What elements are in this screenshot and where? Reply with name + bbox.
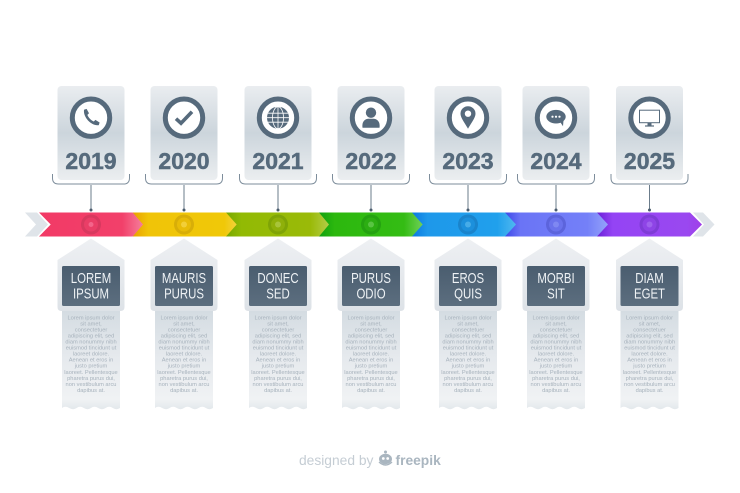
- description text: adipiscing elit, sed: [533, 334, 579, 340]
- node: [268, 214, 288, 234]
- description text: laoreet dolore.: [538, 352, 575, 358]
- description text: adipiscing elit, sed: [255, 334, 301, 340]
- description text: Lorem ipsum dolor: [532, 316, 580, 322]
- label text: DIAM: [635, 269, 664, 286]
- icon: freepik logo: [379, 450, 392, 465]
- label box: [62, 266, 120, 306]
- bracket: [146, 174, 222, 184]
- label text: [257, 269, 299, 302]
- node: [361, 214, 381, 234]
- bracket: [240, 174, 316, 184]
- label text: QUIS: [454, 285, 482, 302]
- description text: laoreet. Pellentesque: [157, 370, 211, 376]
- description text: laoreet. Pellentesque: [529, 370, 583, 376]
- footer credit: [299, 450, 441, 468]
- segment 2023: [412, 212, 516, 236]
- arrow: right grey chevron: [693, 212, 714, 236]
- description text: pharetra purus dui,: [532, 376, 580, 382]
- description text: Lorem ipsum dolor: [347, 316, 395, 322]
- label box: [342, 266, 400, 306]
- description text: sit amet,: [360, 322, 382, 328]
- freepik text: freepik: [396, 453, 441, 468]
- description text: euismod tincidunt ut: [443, 346, 494, 352]
- description text: justo pretium: [261, 364, 295, 370]
- description text: dapibus at.: [454, 388, 482, 394]
- description text: Lorem ipsum dolor: [160, 316, 208, 322]
- description text: Lorem ipsum dolor: [254, 316, 302, 322]
- label text: [537, 269, 575, 302]
- description text: euismod tincidunt ut: [531, 346, 582, 352]
- description text: pharetra purus dui,: [626, 376, 674, 382]
- label text: SIT: [547, 285, 565, 302]
- description text: non vestibulum arcu: [531, 382, 581, 388]
- label box: [155, 266, 213, 306]
- year card: [150, 86, 218, 180]
- description text: adipiscing elit, sed: [68, 334, 114, 340]
- description text: sit amet,: [173, 322, 195, 328]
- description text: pharetra purus dui,: [67, 376, 115, 382]
- label text: [634, 269, 665, 302]
- description text: justo pretium: [74, 364, 108, 370]
- label text: MORBI: [537, 269, 575, 286]
- description text: euismod tincidunt ut: [253, 346, 304, 352]
- designed by text: designed by: [299, 453, 374, 468]
- description text: laoreet dolore.: [166, 352, 203, 358]
- description text: consectetuer: [75, 328, 107, 334]
- label tag: [58, 238, 124, 311]
- description text: sit amet,: [639, 322, 661, 328]
- segment 2022: [319, 212, 423, 236]
- column 2025: [611, 86, 688, 409]
- description text: non vestibulum arcu: [443, 382, 493, 388]
- label box: [249, 266, 307, 306]
- label tag: [616, 238, 683, 311]
- description text: dapibus at.: [542, 388, 570, 394]
- label box: [620, 266, 678, 306]
- description text: non vestibulum arcu: [346, 382, 396, 388]
- year: 2024: [530, 148, 582, 174]
- description text: adipiscing elit, sed: [445, 334, 491, 340]
- column 2024: [518, 86, 594, 409]
- description text: consectetuer: [355, 328, 387, 334]
- description text: diam nonummy nibh: [345, 340, 397, 346]
- connector: [90, 185, 92, 212]
- label tag: [434, 238, 502, 311]
- description text: justo pretium: [539, 364, 573, 370]
- description text: pharetra purus dui,: [347, 376, 395, 382]
- description text: laoreet dolore.: [260, 352, 297, 358]
- description text: laoreet dolore.: [73, 352, 110, 358]
- description text: non vestibulum arcu: [624, 382, 675, 388]
- year: 2021: [252, 148, 304, 174]
- label text: PURUS: [164, 285, 204, 302]
- column 2021: [240, 86, 316, 409]
- description text: justo pretium: [167, 364, 201, 370]
- label box: [439, 266, 497, 306]
- description text: Aenean et eros in: [256, 358, 300, 364]
- bracket: [430, 174, 506, 184]
- label text: [351, 269, 391, 302]
- column 2019: [52, 86, 130, 409]
- label text: IPSUM: [73, 285, 109, 302]
- arrow: left grey chevron: [25, 212, 48, 236]
- year card: [338, 86, 404, 180]
- description text: euismod tincidunt ut: [66, 346, 117, 352]
- description text: sit amet,: [267, 322, 289, 328]
- description paper: [155, 311, 213, 409]
- connector: [554, 185, 558, 212]
- label text: LOREM: [71, 269, 111, 286]
- segment 2025: [597, 212, 702, 236]
- label text: EGET: [634, 285, 665, 302]
- description text: Lorem ipsum dolor: [67, 316, 115, 322]
- description text: laoreet. Pellentesque: [251, 370, 305, 376]
- description text: dapibus at.: [264, 388, 292, 394]
- bracket: [52, 174, 130, 184]
- description text: consectetuer: [452, 328, 484, 334]
- description text: non vestibulum arcu: [159, 382, 209, 388]
- icon: phone: [72, 99, 110, 136]
- timeline bar: [39, 212, 702, 236]
- description text: laoreet dolore.: [353, 352, 390, 358]
- node: [458, 214, 478, 234]
- description text: diam nonummy nibh: [530, 340, 582, 346]
- bracket: [611, 174, 688, 184]
- description text: sit amet,: [457, 322, 479, 328]
- description text: pharetra purus dui,: [254, 376, 302, 382]
- bracket: [332, 174, 410, 184]
- description text: pharetra purus dui,: [444, 376, 492, 382]
- description text: Aenean et eros in: [627, 358, 672, 364]
- description text: pharetra purus dui,: [160, 376, 208, 382]
- label tag: [522, 238, 590, 311]
- description text: dapibus at.: [170, 388, 198, 394]
- description text: euismod tincidunt ut: [624, 346, 675, 352]
- year: 2020: [158, 148, 210, 174]
- icon: chat bubble: [537, 99, 575, 136]
- label text: ODIO: [356, 285, 386, 302]
- label text: PURUS: [351, 269, 391, 286]
- description text: laoreet. Pellentesque: [441, 370, 495, 376]
- description text: Aenean et eros in: [534, 358, 578, 364]
- description text: sit amet,: [545, 322, 567, 328]
- bracket: [518, 174, 594, 184]
- year: 2023: [442, 148, 494, 174]
- label text: [162, 269, 206, 302]
- label tag: [150, 238, 218, 311]
- connector: [648, 185, 651, 212]
- description text: sit amet,: [80, 322, 102, 328]
- column 2020: [146, 86, 222, 409]
- column 2023: [430, 86, 506, 409]
- label text: EROS: [452, 269, 484, 286]
- description text: diam nonummy nibh: [65, 340, 117, 346]
- year card: [244, 86, 312, 180]
- description text: dapibus at.: [636, 388, 664, 394]
- description text: diam nonummy nibh: [442, 340, 494, 346]
- connector: [466, 185, 470, 212]
- connector: [182, 185, 186, 212]
- year card: [522, 86, 590, 180]
- segment 2019: [39, 212, 143, 236]
- connector: [276, 185, 280, 212]
- year card: [616, 86, 683, 180]
- description text: adipiscing elit, sed: [626, 334, 673, 340]
- year card: [58, 86, 124, 180]
- node: [546, 214, 566, 234]
- year: 2022: [345, 148, 397, 174]
- description text: laoreet. Pellentesque: [64, 370, 118, 376]
- description text: justo pretium: [354, 364, 388, 370]
- description text: Aenean et eros in: [446, 358, 490, 364]
- description text: consectetuer: [262, 328, 294, 334]
- description text: justo pretium: [632, 364, 666, 370]
- label box: [527, 266, 585, 306]
- icon: person: [352, 99, 390, 136]
- node: [81, 214, 101, 234]
- description text: non vestibulum arcu: [253, 382, 303, 388]
- label tag: [338, 238, 404, 311]
- description text: Lorem ipsum dolor: [444, 316, 492, 322]
- label text: [71, 269, 111, 302]
- year: 2019: [65, 148, 117, 174]
- description text: dapibus at.: [77, 388, 105, 394]
- year card: [434, 86, 502, 180]
- label text: DONEC: [257, 269, 299, 286]
- description text: Lorem ipsum dolor: [626, 316, 673, 322]
- description text: adipiscing elit, sed: [348, 334, 394, 340]
- description text: consectetuer: [168, 328, 200, 334]
- description paper: [249, 311, 307, 409]
- description text: laoreet dolore.: [631, 352, 668, 358]
- column 2022: [332, 86, 410, 409]
- label text: [452, 269, 484, 302]
- description text: non vestibulum arcu: [66, 382, 116, 388]
- segment 2020: [133, 212, 237, 236]
- segment 2024: [505, 212, 608, 236]
- description paper: [620, 311, 678, 409]
- description text: dapibus at.: [357, 388, 385, 394]
- segment 2021: [226, 212, 329, 236]
- description text: diam nonummy nibh: [158, 340, 210, 346]
- icon: map pin: [449, 99, 487, 136]
- description text: Aenean et eros in: [162, 358, 206, 364]
- description text: laoreet. Pellentesque: [344, 370, 398, 376]
- description text: justo pretium: [451, 364, 485, 370]
- label text: MAURIS: [162, 269, 206, 286]
- description paper: [439, 311, 497, 409]
- connector: [370, 185, 372, 212]
- node: [640, 214, 660, 234]
- icon: globe: [259, 99, 297, 136]
- icon: check: [165, 99, 203, 136]
- description text: diam nonummy nibh: [624, 340, 675, 346]
- description text: euismod tincidunt ut: [159, 346, 210, 352]
- label text: SED: [266, 285, 290, 302]
- description paper: [342, 311, 400, 409]
- description text: laoreet. Pellentesque: [623, 370, 676, 376]
- description text: euismod tincidunt ut: [346, 346, 397, 352]
- description paper: [527, 311, 585, 409]
- description paper: [62, 311, 120, 409]
- icon: monitor: [631, 99, 668, 136]
- label tag: [244, 238, 312, 311]
- description text: adipiscing elit, sed: [161, 334, 207, 340]
- description text: diam nonummy nibh: [252, 340, 304, 346]
- description text: consectetuer: [540, 328, 572, 334]
- description text: Aenean et eros in: [69, 358, 113, 364]
- node: [174, 214, 194, 234]
- description text: Aenean et eros in: [349, 358, 393, 364]
- description text: laoreet dolore.: [450, 352, 487, 358]
- description text: consectetuer: [633, 328, 666, 334]
- year: 2025: [624, 148, 675, 174]
